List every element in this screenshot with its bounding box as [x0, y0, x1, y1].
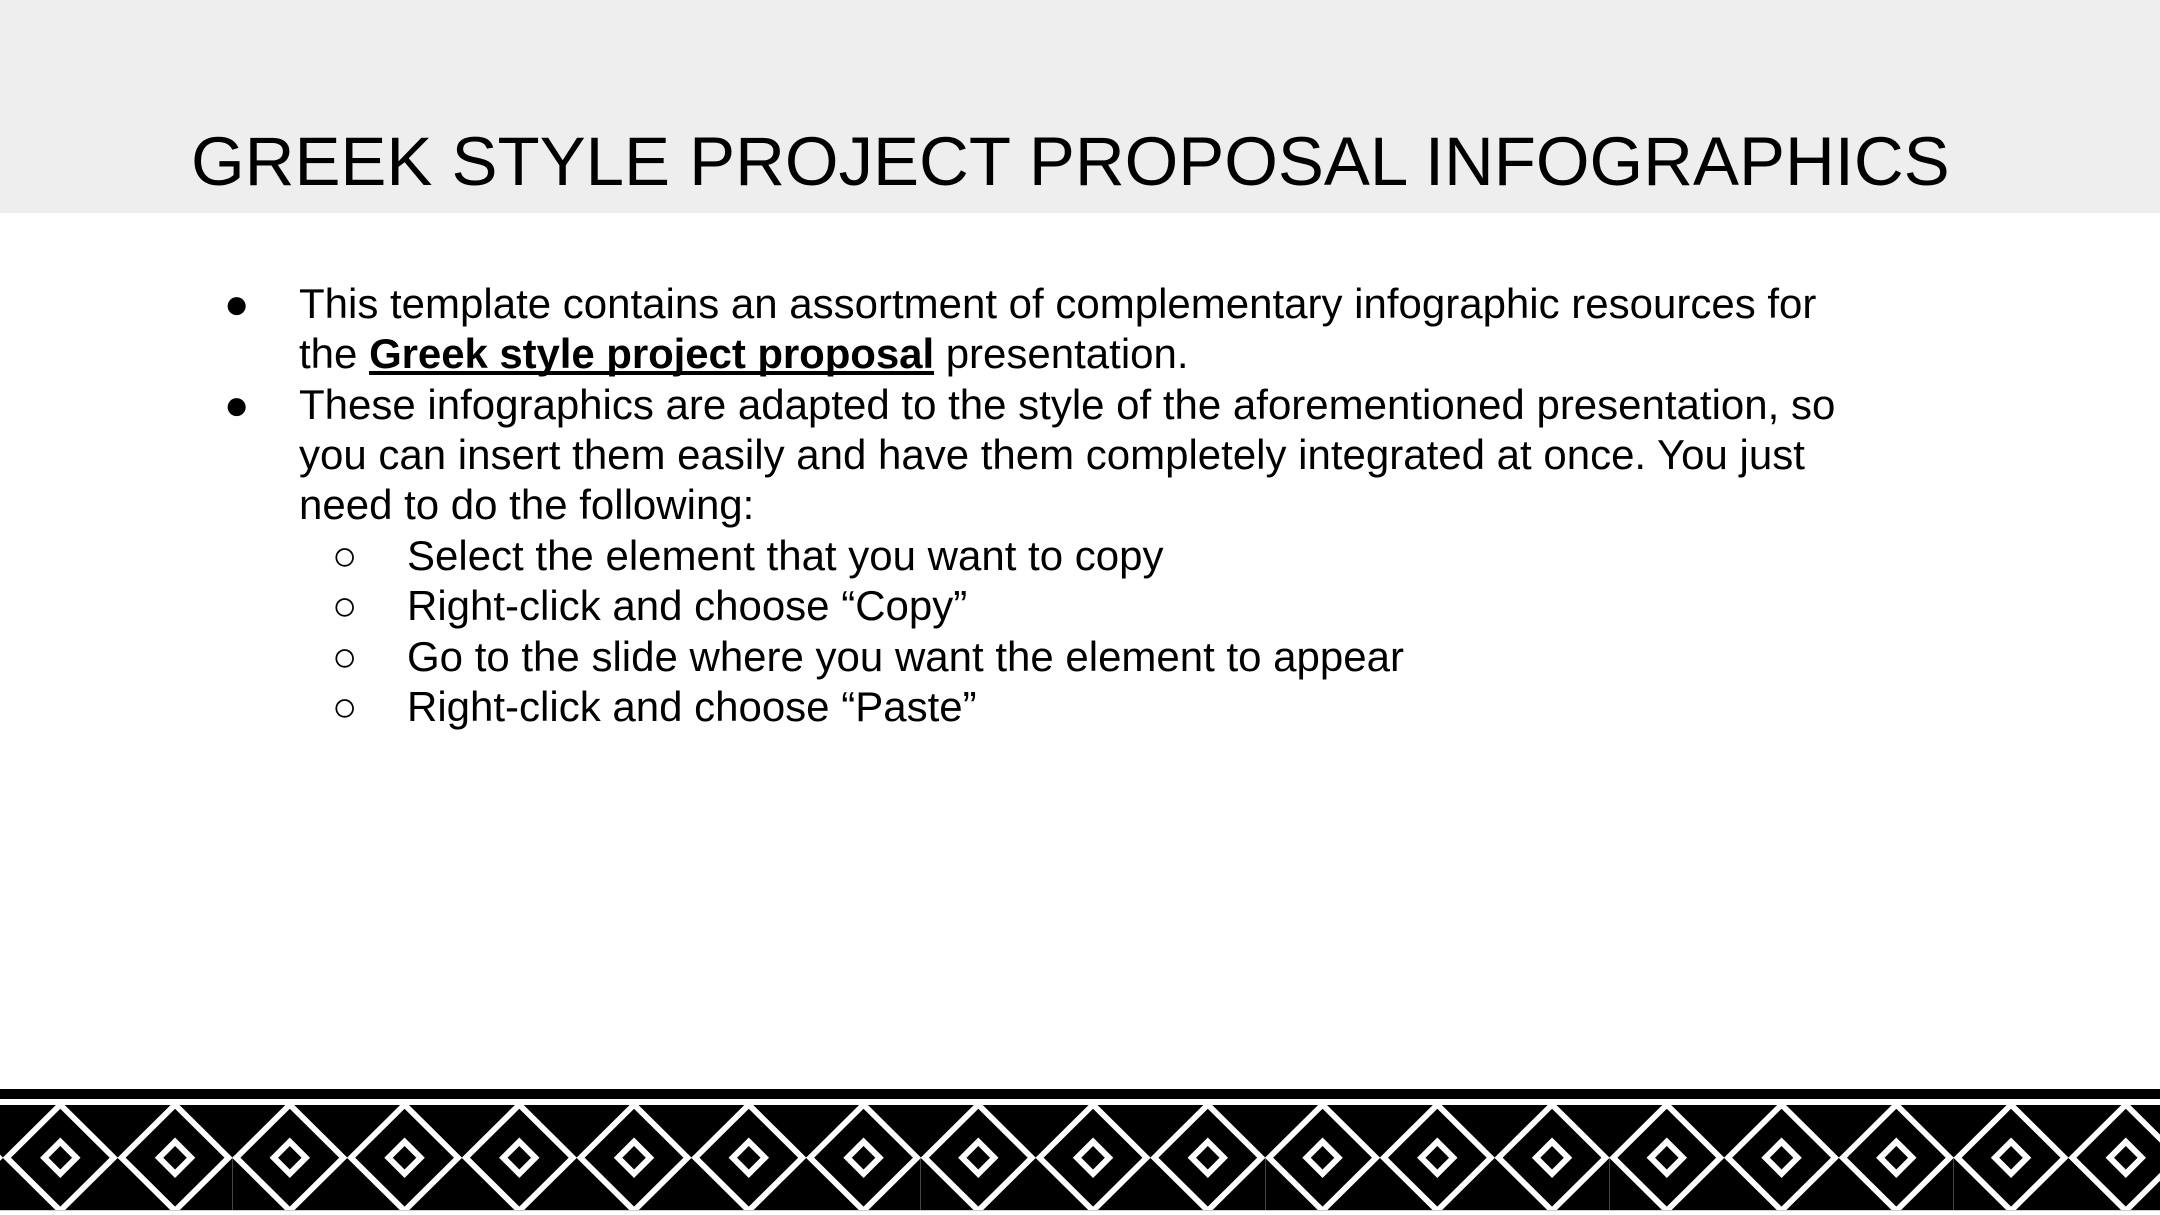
header band	[0, 0, 2160, 213]
step 2 text: Right-click and choose “Copy”	[407, 582, 967, 629]
bullet 1: ●	[224, 280, 249, 327]
bullet 2 text: These infographics are adapted to the style of the aforementioned presentation, so	[299, 381, 1835, 428]
bullet 1 text: This template contains an assortment of complementary infographic resources for	[299, 280, 1816, 327]
sub-bullet 3: ○	[332, 633, 357, 680]
title: GREEK STYLE PROJECT PROPOSAL INFOGRAPHICS	[191, 123, 1950, 200]
sub-bullet 1: ○	[332, 532, 357, 579]
bullet 2 text line 3: need to do the following:	[299, 481, 754, 528]
sub-bullet 2: ○	[332, 582, 357, 629]
bullet 1 text continued with link: the Greek style project proposal presentation.	[299, 330, 1189, 377]
body text block	[224, 280, 1835, 730]
sub-bullet 4: ○	[332, 683, 357, 730]
step 3 text: Go to the slide where you want the element to appear	[407, 633, 1404, 680]
step 4 text: Right-click and choose “Paste”	[407, 683, 977, 730]
greek key border	[0, 1089, 2160, 1211]
step 1 text: Select the element that you want to copy	[407, 532, 1163, 579]
bullet 2 text line 2: you can insert them easily and have them completely integrated at once. You just	[299, 431, 1805, 478]
bullet 2: ●	[224, 381, 249, 428]
